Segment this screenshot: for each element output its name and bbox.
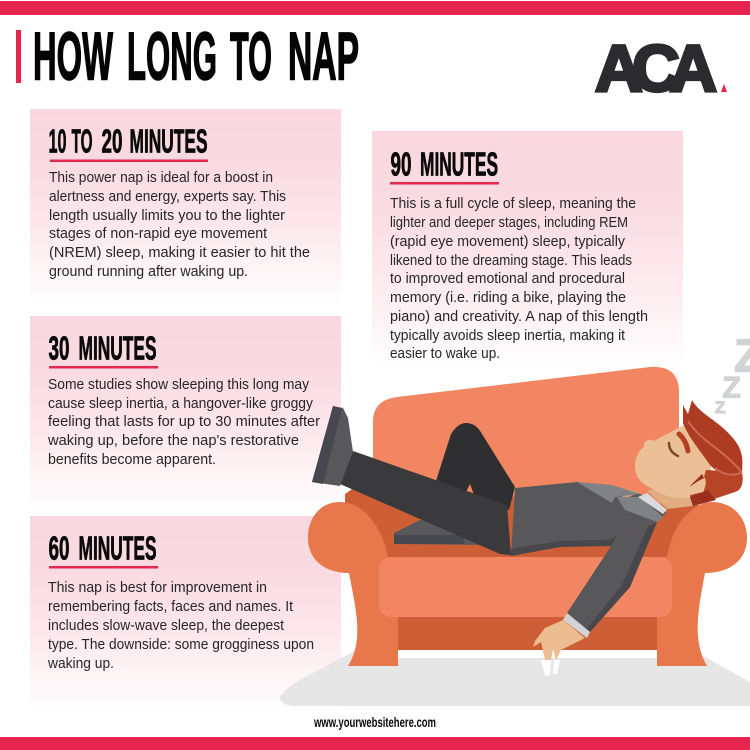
- heading: 60 minutes: 60: [48, 530, 70, 566]
- heading: 60 minutes: MINUTES: [78, 530, 156, 566]
- title: TO: [230, 18, 272, 94]
- panel: 10 to 20 minutes: [30, 109, 341, 307]
- text block: 10 to 20 minutes: length usually limits you to the lighter: [49, 208, 285, 224]
- lower hair: [690, 470, 743, 506]
- neck: [647, 480, 700, 509]
- illustration: sofa: [308, 367, 747, 666]
- heading: 30 minutes: 30: [48, 330, 70, 366]
- sofa seat back: [345, 489, 700, 557]
- title: [16, 18, 359, 94]
- text block: 30 minutes: waking up, before the nap's restorative: [47, 433, 299, 449]
- tan shirt: [610, 486, 640, 499]
- far leg: [435, 423, 515, 510]
- top bar: [0, 1, 750, 15]
- near leg: [340, 451, 511, 555]
- logo: ACA: ACA: [595, 31, 717, 105]
- text block: 90 minutes: to improved emotional and procedural: [390, 271, 625, 287]
- heading: 10 to 20 minutes: [48, 122, 208, 160]
- heading: 30 minutes: [48, 330, 156, 366]
- eyebrow: [679, 434, 688, 451]
- text block: 90 minutes: This is a full cycle of sleep, meaning the: [390, 196, 636, 212]
- torso: [511, 482, 667, 556]
- text block: 30 minutes: [47, 377, 320, 468]
- text block: 10 to 20 minutes: This power nap is ideal for a boost in: [49, 170, 273, 186]
- flat shoe: [394, 520, 490, 545]
- text: NAP: [288, 18, 359, 94]
- text block: 90 minutes: likened to the dreaming stage. This leads: [390, 253, 632, 269]
- hand: [533, 620, 585, 660]
- text block: 90 minutes: [390, 196, 648, 362]
- text block: 90 minutes: memory (i.e. riding a bike, playing the: [390, 290, 626, 306]
- text block: 10 to 20 minutes: stages of non-rapid eye movement: [49, 226, 267, 242]
- text block: 60 minutes: waking up.: [47, 656, 114, 672]
- sofa backrest: [373, 367, 679, 530]
- text block: 60 minutes: remembering facts, faces and names. It: [48, 599, 293, 615]
- text block: 60 minutes: [47, 580, 314, 672]
- icon: sleeping z letters: [715, 330, 750, 417]
- text block: 30 minutes: cause sleep inertia, a hangover-like groggy: [48, 396, 314, 412]
- text block: 10 to 20 minutes: (NREM) sleep, making it easier to hit the: [49, 245, 310, 261]
- heading: 90 minutes: [390, 146, 498, 182]
- heading: 90 minutes: 90: [390, 146, 412, 182]
- panel: 30 minutes: [30, 316, 341, 514]
- text block: 10 to 20 minutes: ground running after waking up.: [49, 264, 248, 280]
- footer url: www.yourwebsitehere.com: [313, 714, 436, 730]
- text block: 60 minutes: type. The downside: some grogginess upon: [48, 637, 314, 653]
- heading: 10 to 20 minutes: 10: [48, 122, 66, 160]
- title: HOW: [33, 18, 113, 94]
- sofa left arm: [308, 502, 398, 666]
- heading: 10 to 20 minutes: MINUTES: [130, 122, 208, 160]
- heading: 10 to 20 minutes: TO: [72, 122, 92, 160]
- fingertips: [541, 660, 560, 676]
- text block: 90 minutes: piano) and creativity. A nap of this length: [390, 309, 648, 325]
- sideburn: [689, 474, 716, 506]
- panel: 90 minutes: [372, 131, 683, 369]
- sofa right arm: [657, 502, 747, 666]
- text block: 30 minutes: feeling that lasts for up to 30 minutes after: [48, 414, 320, 430]
- panel: 60 minutes: [30, 516, 341, 714]
- bottom bar: [0, 737, 750, 750]
- sofa seat cushion: [379, 557, 672, 617]
- text block: 10 to 20 minutes: [49, 170, 310, 280]
- cuff: [563, 613, 590, 638]
- text block: 30 minutes: Some studies show sleeping this long may: [48, 377, 310, 393]
- arm: [567, 522, 657, 632]
- illustration: sleeping man: [312, 400, 743, 676]
- icon: sleeping z letters: Z: [722, 372, 741, 404]
- raised shoe: [312, 406, 353, 486]
- text block: 60 minutes: includes slow-wave sleep, the deepest: [48, 618, 284, 634]
- text block: 10 to 20 minutes: alertness and energy, experts say. This: [49, 189, 286, 205]
- heading: 10 to 20 minutes: 20: [102, 122, 122, 160]
- text block: 90 minutes: easier to wake up.: [390, 346, 500, 362]
- illustration: floor shadow: [280, 650, 750, 706]
- heading: 60 minutes: [48, 530, 156, 566]
- text block: 90 minutes: typically avoids sleep inertia, making it: [390, 328, 625, 344]
- icon: sleeping z letters: Z: [715, 398, 725, 417]
- heading: 30 minutes: MINUTES: [78, 330, 156, 366]
- text block: 90 minutes: (rapid eye movement) sleep, typically: [390, 234, 626, 250]
- collar: [638, 493, 667, 514]
- sofa under seat: [395, 610, 660, 650]
- closed eye: [669, 443, 678, 456]
- top hair: [683, 400, 742, 475]
- text block: 30 minutes: benefits become apparent.: [48, 452, 216, 468]
- heading: 90 minutes: MINUTES: [420, 146, 498, 182]
- text block: 60 minutes: This nap is best for improvement in: [48, 580, 267, 596]
- title: LONG: [127, 18, 217, 94]
- lapel: [577, 482, 663, 522]
- hair highlight: [688, 421, 741, 475]
- jacket shadow: [511, 535, 617, 556]
- text block: 90 minutes: lighter and deeper stages, including REM: [390, 215, 628, 231]
- head: [635, 425, 712, 498]
